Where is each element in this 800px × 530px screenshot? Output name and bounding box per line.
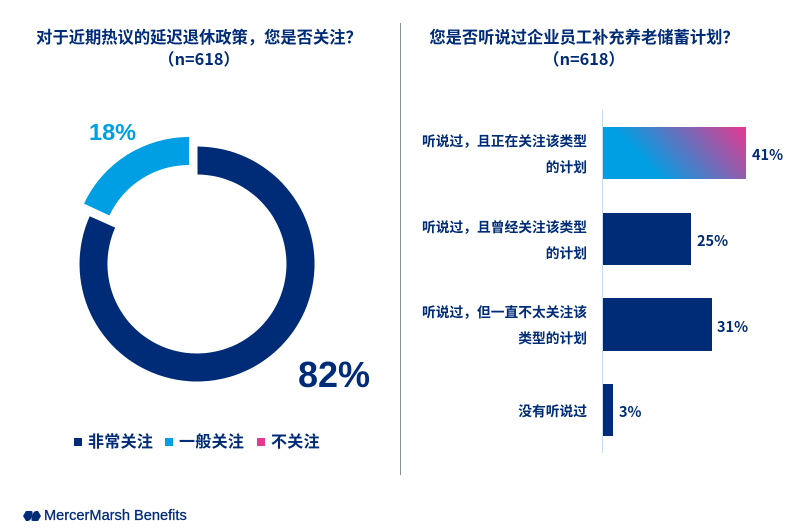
legend swatch: average [165,438,173,446]
legend text: average: 一般关注 [179,434,244,451]
legend swatch: very concerned [74,438,82,446]
left chart title: 对于近期热议的延迟退休政策，您是否关注？ [36,24,362,48]
bar label 25%: 的计划 [546,242,587,262]
logo text: MercerMarsh Benefits [44,508,187,524]
segment: 82% [80,146,315,381]
bar value 25%: 25% [697,230,728,251]
bar chart axis [602,110,603,453]
right chart title [429,24,739,70]
bar value 3%: 3% [619,401,642,422]
bar: 3% [603,384,613,436]
bar label 3%: 没有听说过 [518,400,587,420]
logo: Mercer Marsh Benefits [23,508,187,524]
panel divider [400,23,401,475]
donut value 18%: 18% [89,119,136,145]
bar label 25%: 听说过，且曾经关注该类型 [422,216,587,236]
bar label 41% [422,130,587,176]
bar label 31% [422,301,587,347]
legend swatch: not concerned [257,438,265,446]
bar label 31%: 听说过，但一直不太关注该 [422,301,587,321]
right chart title: 您是否听说过企业员工补充养老储蓄计划？ [429,24,739,48]
donut chart [80,137,315,382]
donut value 82%: 82% [298,354,370,395]
bar label 25% [422,216,587,262]
bar label 31%: 类型的计划 [518,327,587,347]
bar label 41%: 听说过，且正在关注该类型 [422,130,587,150]
legend text: not concerned: 不关注 [271,434,320,451]
right chart title: （n=618） [543,46,625,70]
legend text: very concerned: 非常关注 [88,434,153,451]
bar value 31%: 31% [717,316,748,337]
bar label 41%: 的计划 [546,156,587,176]
bar value 41%: 41% [752,144,783,165]
segment: 18% [84,137,189,216]
bar: 25% [603,213,691,265]
left chart title [36,24,362,70]
bar: 41% [603,127,746,179]
logo mark [23,511,41,521]
left chart title: （n=618） [158,46,240,70]
bar: 31% [603,298,712,351]
